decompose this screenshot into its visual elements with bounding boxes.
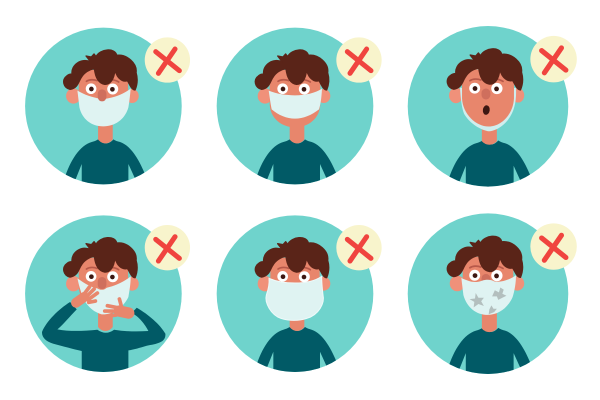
hair	[64, 238, 137, 278]
crumpled mask	[77, 276, 131, 314]
panel: mask too large	[217, 215, 382, 378]
oversized mask	[266, 276, 323, 320]
badge: red cross	[145, 225, 190, 270]
panel: mask covering only the mouth	[217, 28, 382, 190]
open mouth	[482, 105, 490, 115]
nose	[482, 89, 490, 99]
panel: dirty mask	[408, 213, 577, 380]
raised arms and torso	[42, 302, 165, 378]
panel: touching the mask with hands	[25, 215, 190, 378]
badge: red cross	[145, 37, 190, 83]
right hand	[105, 299, 129, 316]
stains	[470, 288, 506, 314]
badge: red cross	[336, 225, 382, 270]
panel: mask pulled down under the chin	[408, 26, 577, 192]
badge: red cross	[530, 223, 577, 270]
nose	[482, 274, 490, 284]
hair	[255, 238, 329, 278]
left hand	[76, 287, 97, 303]
chin mask band	[460, 88, 516, 131]
mask off the nose and above the chin	[269, 89, 322, 119]
hair	[64, 50, 137, 90]
surgical mask under the nose	[77, 89, 131, 126]
badge: red cross	[530, 36, 577, 82]
stained mask	[461, 275, 516, 315]
badge: red cross	[336, 37, 382, 83]
nose	[98, 277, 106, 289]
long face	[462, 69, 514, 126]
hair	[447, 236, 523, 277]
panel: mask below the nose	[25, 28, 190, 190]
hair	[255, 50, 329, 90]
nose	[98, 89, 106, 101]
hair	[447, 49, 523, 90]
